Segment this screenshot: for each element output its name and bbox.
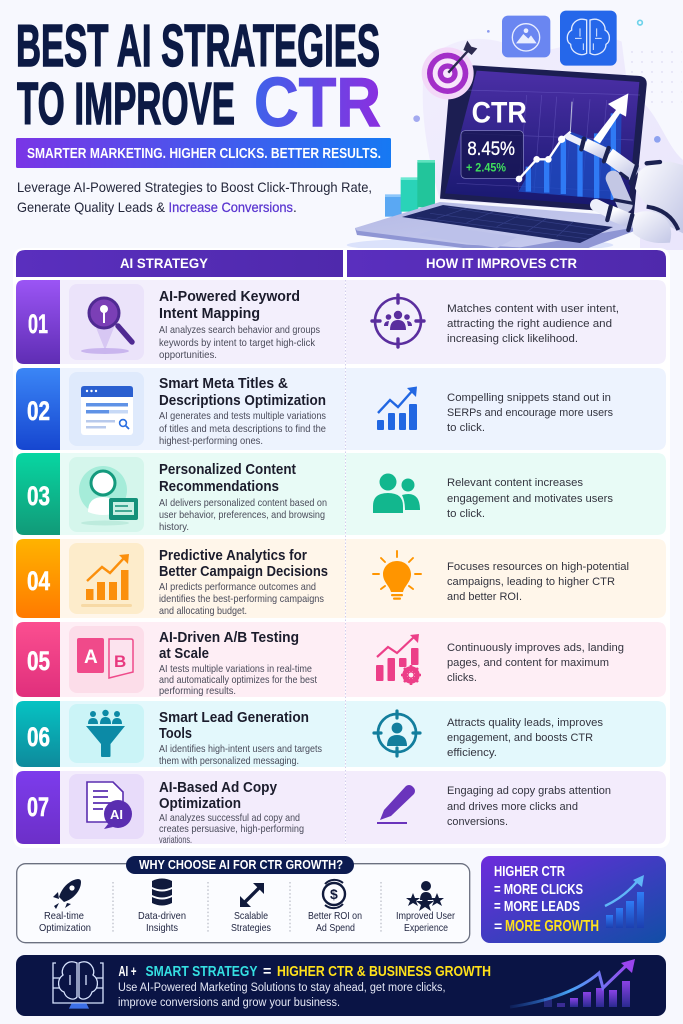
- icon: light bulb: [373, 551, 421, 600]
- row 07 strategy: [16, 771, 345, 846]
- strategy text 07: [159, 780, 304, 846]
- benefit: better ROI: Better ROI on: [308, 910, 362, 922]
- benefit text 07: and drives more clicks and: [447, 801, 578, 813]
- benefit: improved user experience: [396, 881, 455, 934]
- tagline band: [16, 138, 391, 168]
- icon: rising bar chart: [377, 386, 417, 430]
- benefit: data-driven insights: Insights: [146, 922, 178, 934]
- icon: magnifier pin: [69, 284, 144, 360]
- benefit text 01: [447, 303, 619, 345]
- benefit text 02: SERPs and encourage more users: [447, 407, 613, 419]
- icon: audience target: [372, 295, 424, 347]
- strategy text 07: variations.: [159, 835, 192, 846]
- row 06 benefit: [346, 701, 666, 767]
- benefit: real-time optimization: Optimization: [39, 922, 91, 934]
- number tab 01: [16, 280, 60, 364]
- equation text: MORE GROWTH: [505, 918, 599, 935]
- icon: target with dart: [422, 41, 477, 99]
- icon: robot hand: [568, 137, 683, 243]
- strategy text 07: creates persuasive, high-performing: [159, 824, 304, 835]
- strategy text 02: [159, 376, 326, 447]
- laptop screen: [440, 65, 647, 213]
- number tab 06: [16, 701, 60, 767]
- benefit text 02: Compelling snippets stand out in: [447, 392, 611, 404]
- strategy text 02: Descriptions Optimization: [159, 393, 326, 409]
- laptop screen: 8.45%: [467, 139, 515, 160]
- panel: closing banner: [16, 955, 666, 1016]
- icon: AI brain on monitor: [53, 962, 103, 1008]
- benefit: better ROI: Ad Spend: [316, 922, 355, 934]
- strategy text 04: and allocating budget.: [159, 606, 247, 617]
- icon: chart with gear: [376, 634, 421, 685]
- benefit text 07: Engaging ad copy grabs attention: [447, 785, 611, 797]
- benefit text 03: Relevant content increases: [447, 477, 583, 489]
- laptop base and keyboard: [347, 202, 637, 252]
- benefit text 01: attracting the right audience and: [447, 318, 612, 330]
- equation text: = MORE CLICKS: [494, 882, 583, 898]
- strategy text 06: AI identifies high-intent users and targets: [159, 744, 322, 755]
- benefit text 05: [447, 642, 624, 684]
- strategy text 04: [159, 548, 328, 617]
- benefit: real-time optimization: [39, 879, 91, 934]
- banner headline: =: [263, 964, 271, 980]
- banner body text: improve conversions and grow your business.: [118, 997, 340, 1009]
- title: [16, 13, 381, 141]
- row 03 benefit: [346, 453, 666, 535]
- benefit: data-driven insights: [138, 878, 186, 934]
- panel: higher CTR equation: [481, 856, 666, 943]
- strategy text 06: Tools: [159, 726, 192, 742]
- panel: why choose AI: [17, 856, 470, 943]
- subtitle: Increase Conversions: [168, 200, 293, 215]
- strategy text 06: [159, 710, 322, 767]
- banner body text: Use AI-Powered Marketing Solutions to stay ahead, get more clicks,: [118, 982, 446, 994]
- benefit: improved user experience: Experience: [404, 922, 448, 934]
- benefit text 01: Matches content with user intent,: [447, 303, 619, 315]
- row 06 strategy: [16, 701, 345, 767]
- benefit text 02: to click.: [447, 422, 485, 434]
- number tab 04: [16, 539, 60, 618]
- row 07 benefit: [346, 771, 666, 844]
- subtitle: Generate Quality Leads &: [17, 200, 165, 215]
- icon: brain tile: [560, 11, 617, 66]
- hero illustration: laptop with CTR dashboard: [347, 11, 683, 252]
- icon: user with content card: [69, 457, 144, 532]
- row 03 strategy: [16, 453, 345, 535]
- icon: two people: [373, 474, 420, 513]
- strategy text 01: Intent Mapping: [159, 306, 260, 322]
- row 02 strategy: [16, 368, 345, 450]
- strategy text 03: history.: [159, 522, 189, 533]
- benefit text 04: Focuses resources on high-potential: [447, 561, 629, 573]
- number tab 03: 03: [27, 481, 50, 511]
- benefit text 07: conversions.: [447, 816, 508, 828]
- benefit text 03: engagement and motivates users: [447, 493, 613, 505]
- table container: [13, 248, 670, 848]
- column header: how it improves CTR: [347, 250, 666, 277]
- strategy text 03: Recommendations: [159, 479, 279, 495]
- benefit text 04: and better ROI.: [447, 591, 522, 603]
- number tab 05: [16, 622, 60, 697]
- row 04 strategy: [16, 539, 345, 618]
- row 01 strategy: [16, 280, 345, 364]
- column header: AI strategy: [16, 250, 343, 277]
- number tab 06: 06: [27, 722, 50, 752]
- strategy text 01: AI analyzes search behavior and groups: [159, 325, 320, 336]
- number tab 07: 07: [27, 792, 49, 822]
- icon: A/B pages: B: [114, 652, 126, 671]
- subtitle: [17, 180, 372, 215]
- column header: AI strategy: AI STRATEGY: [120, 255, 209, 271]
- column header: how it improves CTR: HOW IT IMPROVES CTR: [426, 255, 577, 271]
- equation text: =: [494, 918, 502, 934]
- icon: picture tile: [502, 16, 550, 57]
- benefit: scalable strategies: Scalable: [234, 910, 268, 922]
- benefit text 06: engagement, and boosts CTR: [447, 732, 593, 744]
- strategy text 03: user behavior, preferences, and browsing: [159, 510, 325, 521]
- subtitle: Leverage AI-Powered Strategies to Boost Click-Through Rate,: [17, 180, 372, 195]
- banner headline: [118, 964, 491, 980]
- strategy text 04: AI predicts performance outcomes and: [159, 582, 316, 593]
- strategy text 03: [159, 462, 327, 533]
- strategy text 05: and automatically optimizes for the best: [159, 675, 317, 686]
- small bar chart beside laptop: [385, 160, 435, 217]
- icon: lead funnel: [69, 704, 144, 763]
- banner body text: [118, 982, 446, 1009]
- equation text: = MORE LEADS: [494, 899, 580, 915]
- strategy text 01: keywords by intent to target high-click: [159, 338, 316, 349]
- benefit: scalable strategies: Strategies: [231, 922, 271, 934]
- benefit text 05: clicks.: [447, 672, 477, 684]
- strategy text 06: Smart Lead Generation: [159, 710, 309, 726]
- strategy text 02: highest-performing ones.: [159, 436, 263, 447]
- strategy text 05: AI tests multiple variations in real-time: [159, 664, 312, 675]
- title: CTR: [254, 63, 381, 141]
- icon: browser snippet: [69, 372, 144, 446]
- benefit: improved user experience: Improved User: [396, 910, 455, 922]
- title: TO IMPROVE: [17, 71, 235, 137]
- row 05 benefit: [346, 622, 666, 697]
- number tab 02: [16, 368, 60, 450]
- laptop screen: CTR: [472, 97, 527, 130]
- icon: A/B pages: A: [84, 647, 98, 668]
- strategy text 01: opportunities.: [159, 350, 217, 361]
- row 04 benefit: [346, 539, 666, 618]
- benefit text 04: campaigns, leading to higher CTR: [447, 576, 615, 588]
- number tab 07: [16, 771, 60, 844]
- title: BEST AI STRATEGIES: [16, 13, 380, 79]
- strategy text 02: of titles and meta descriptions to find the: [159, 424, 326, 435]
- number tab 03: [16, 453, 60, 535]
- number tab 04: 04: [27, 566, 50, 596]
- row 02 benefit: [346, 368, 666, 450]
- strategy text 07: AI analyzes successful ad copy and: [159, 813, 300, 824]
- strategy text 04: Predictive Analytics for: [159, 548, 307, 564]
- benefit text 01: increasing click likelihood.: [447, 333, 578, 345]
- strategy text 07: AI-Based Ad Copy: [159, 780, 277, 796]
- benefit text 05: pages, and content for maximum: [447, 657, 609, 669]
- equation text: [494, 864, 599, 935]
- icon: pencil: [377, 785, 415, 824]
- banner headline: AI +: [118, 964, 136, 980]
- strategy text 06: them with personalized messaging.: [159, 756, 299, 767]
- tagline band: SMARTER MARKETING. HIGHER CLICKS. BETTER RESULTS.: [27, 145, 381, 162]
- benefit: better ROI: $: [330, 886, 338, 902]
- why choose heading pill: WHY CHOOSE AI FOR CTR GROWTH?: [139, 858, 343, 872]
- strategy text 05: AI-Driven A/B Testing: [159, 630, 299, 646]
- benefit text 06: Attracts quality leads, improves: [447, 717, 603, 729]
- icon: AI document: AI: [110, 807, 123, 822]
- benefit: real-time optimization: Real-time: [44, 910, 84, 922]
- number tab 02: 02: [27, 396, 50, 426]
- number tab 01: 01: [28, 309, 48, 339]
- strategy text 05: at Scale: [159, 646, 209, 662]
- benefit: scalable strategies: [231, 883, 271, 934]
- strategy text 05: performing results.: [159, 686, 236, 697]
- strategy text 02: Smart Meta Titles &: [159, 376, 288, 392]
- strategy text 04: Better Campaign Decisions: [159, 564, 328, 580]
- banner headline: HIGHER CTR & BUSINESS GROWTH: [277, 964, 491, 980]
- number tab 05: 05: [27, 646, 50, 676]
- icon: A/B pages: [69, 626, 144, 693]
- icon: user target: [374, 711, 420, 756]
- strategy text 01: [159, 289, 320, 361]
- strategy text 04: identifies the best-performing campaigns: [159, 594, 324, 605]
- strategy text 01: AI-Powered Keyword: [159, 289, 300, 305]
- strategy text 05: [159, 630, 317, 697]
- benefit text 07: [447, 785, 611, 828]
- equation text: HIGHER CTR: [494, 864, 565, 880]
- strategy text 03: Personalized Content: [159, 462, 296, 478]
- benefit: better ROI: [308, 880, 362, 934]
- benefit text 02: [447, 392, 613, 434]
- strategy text 07: Optimization: [159, 796, 241, 812]
- row 05 strategy: [16, 622, 345, 697]
- strategy text 02: AI generates and tests multiple variations: [159, 411, 326, 422]
- icon: AI document: [69, 774, 144, 839]
- benefit text 06: efficiency.: [447, 747, 497, 759]
- why choose heading pill: [126, 856, 354, 874]
- laptop screen: + 2.45%: [466, 161, 506, 175]
- benefit text 06: [447, 717, 603, 759]
- benefit text 03: [447, 477, 613, 520]
- strategy text 03: AI delivers personalized content based on: [159, 498, 327, 509]
- growth chart with arrow: [510, 959, 635, 1007]
- banner headline: SMART STRATEGY: [146, 964, 258, 980]
- benefit text 04: [447, 561, 629, 603]
- row 01 benefit: [346, 280, 666, 364]
- growth chart: [605, 875, 644, 928]
- benefit: data-driven insights: Data-driven: [138, 910, 186, 922]
- icon: orange growth chart: [69, 543, 144, 614]
- benefit text 05: Continuously improves ads, landing: [447, 642, 624, 654]
- benefit text 03: to click.: [447, 508, 485, 520]
- subtitle: .: [293, 200, 297, 215]
